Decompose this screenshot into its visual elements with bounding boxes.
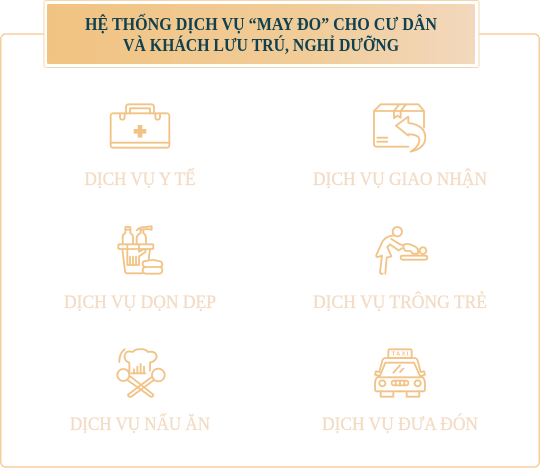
heading: HỆ THỐNG DỊCH VỤ “MAY ĐO” CHO CƯ DÂN <box>85 13 437 34</box>
service: cooking <box>70 349 210 435</box>
label: DỊCH VỤ NẤU ĂN <box>70 413 210 435</box>
label: DỊCH VỤ GIAO NHẬN <box>313 168 487 190</box>
heading <box>85 13 437 55</box>
label: DỊCH VỤ ĐƯA ĐÓN <box>322 413 478 435</box>
icon: taxi: TAXI <box>392 352 409 358</box>
heading: VÀ KHÁCH LƯU TRÚ, NGHỈ DƯỠNG <box>123 34 399 55</box>
icon: cleaning bucket <box>118 226 162 274</box>
service: babysitting <box>313 227 487 313</box>
icon: chef hat and spoons <box>117 349 165 397</box>
label: DỊCH VỤ TRÔNG TRẺ <box>313 291 487 313</box>
service: medical <box>84 104 196 190</box>
icon: medical kit <box>111 104 169 148</box>
icon: caregiver and baby <box>376 227 427 274</box>
service: delivery <box>313 104 487 190</box>
title banner <box>44 0 479 68</box>
label: DỊCH VỤ DỌN DẸP <box>64 292 216 313</box>
icon: taxi <box>375 349 425 397</box>
icon: parcel with return arrow <box>374 104 425 152</box>
label: DỊCH VỤ Y TẾ <box>84 168 196 190</box>
service: transport <box>322 349 478 435</box>
service: cleaning <box>64 226 216 313</box>
